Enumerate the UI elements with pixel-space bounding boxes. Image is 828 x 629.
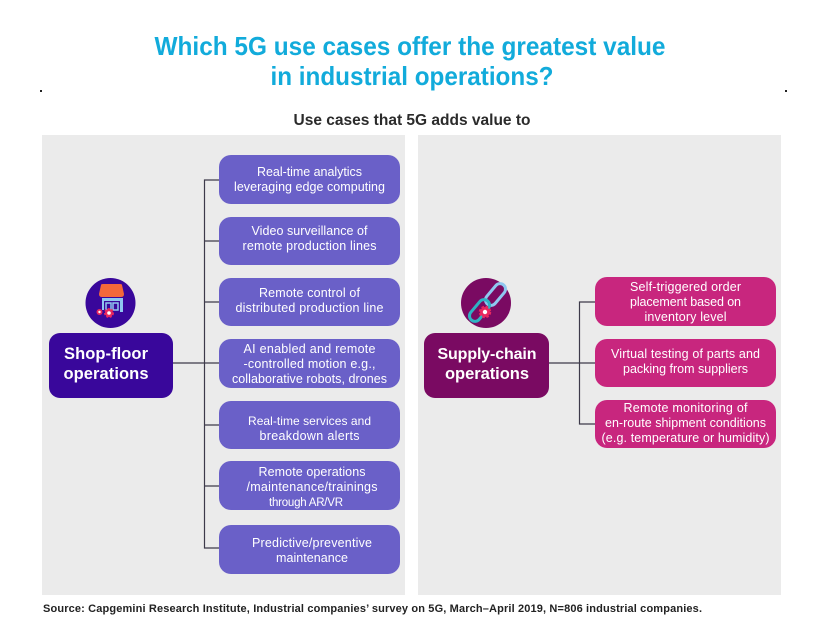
use case: virtual testing: Virtual testing of parts and: [611, 347, 760, 361]
subtitle: Use cases that 5G adds value to: [294, 112, 531, 129]
use case: real-time analytics: leveraging edge computing: [234, 180, 385, 194]
use case: remote operations: Remote operations: [258, 465, 366, 479]
use case: predictive maintenance: [219, 525, 400, 574]
use case: remote control: distributed production line: [236, 301, 384, 315]
use case: remote monitoring: Remote monitoring of: [624, 401, 748, 415]
use case: remote operations: /maintenance/trainings: [246, 480, 378, 494]
use case: self-triggered order: [595, 277, 776, 326]
title: [154, 31, 666, 91]
use case: remote monitoring: [595, 400, 776, 448]
use case: AI enabled motion: [219, 339, 400, 388]
use case: real-time services: Real-time services and: [248, 414, 371, 428]
use case: video surveillance: remote production lines: [242, 239, 376, 253]
use case: remote operations: [219, 461, 400, 510]
use case: remote monitoring: (e.g. temperature or humidity): [602, 431, 770, 445]
title: Which 5G use cases offer the greatest value: [154, 31, 666, 61]
use case: real-time services: [219, 401, 400, 449]
use case: self-triggered order: placement based on: [630, 295, 741, 309]
use case: AI enabled motion: -controlled motion e.g.,: [244, 357, 376, 371]
source note: Source: Capgemini Research Institute, Industrial companies’ survey on 5G, March–April 2019, N=806 industrial companies.: [43, 603, 702, 615]
heading: supply-chain operations: operations: [445, 365, 529, 383]
use case: real-time analytics: Real-time analytics: [257, 165, 362, 179]
use case: video surveillance: [219, 217, 400, 265]
use case: real-time analytics: [219, 155, 400, 204]
use case: remote operations: through AR/VR: [269, 497, 343, 509]
panel: supply-chain operations: [418, 135, 781, 595]
use case: remote control: Remote control of: [259, 286, 361, 300]
use case: video surveillance: Video surveillance of: [252, 224, 368, 238]
heading: shop-floor operations: [49, 333, 173, 398]
use case: self-triggered order: inventory level: [644, 310, 726, 324]
heading: shop-floor operations: Shop-floor: [64, 345, 149, 363]
icon: shop with gears: [86, 278, 136, 328]
use case: virtual testing: packing from suppliers: [623, 362, 748, 376]
use case: AI enabled motion: collaborative robots, drones: [232, 372, 387, 386]
title: in industrial operations?: [270, 61, 554, 91]
use case: predictive maintenance: maintenance: [276, 551, 348, 565]
use case: virtual testing: [595, 339, 776, 387]
panel: shop-floor operations: [42, 135, 405, 595]
use case: AI enabled motion: AI enabled and remote: [244, 342, 376, 356]
heading: supply-chain operations: Supply-chain: [438, 346, 536, 363]
use case: remote monitoring: en-route shipment conditions: [605, 416, 766, 430]
heading: shop-floor operations: operations: [64, 365, 148, 383]
use case: real-time services: breakdown alerts: [260, 429, 360, 443]
icon: chain link with gear: [461, 278, 511, 328]
use case: remote control: [219, 278, 400, 326]
heading: supply-chain operations: [424, 333, 549, 398]
use case: predictive maintenance: Predictive/preventive: [252, 536, 372, 550]
use case: self-triggered order: Self-triggered order: [630, 280, 741, 294]
